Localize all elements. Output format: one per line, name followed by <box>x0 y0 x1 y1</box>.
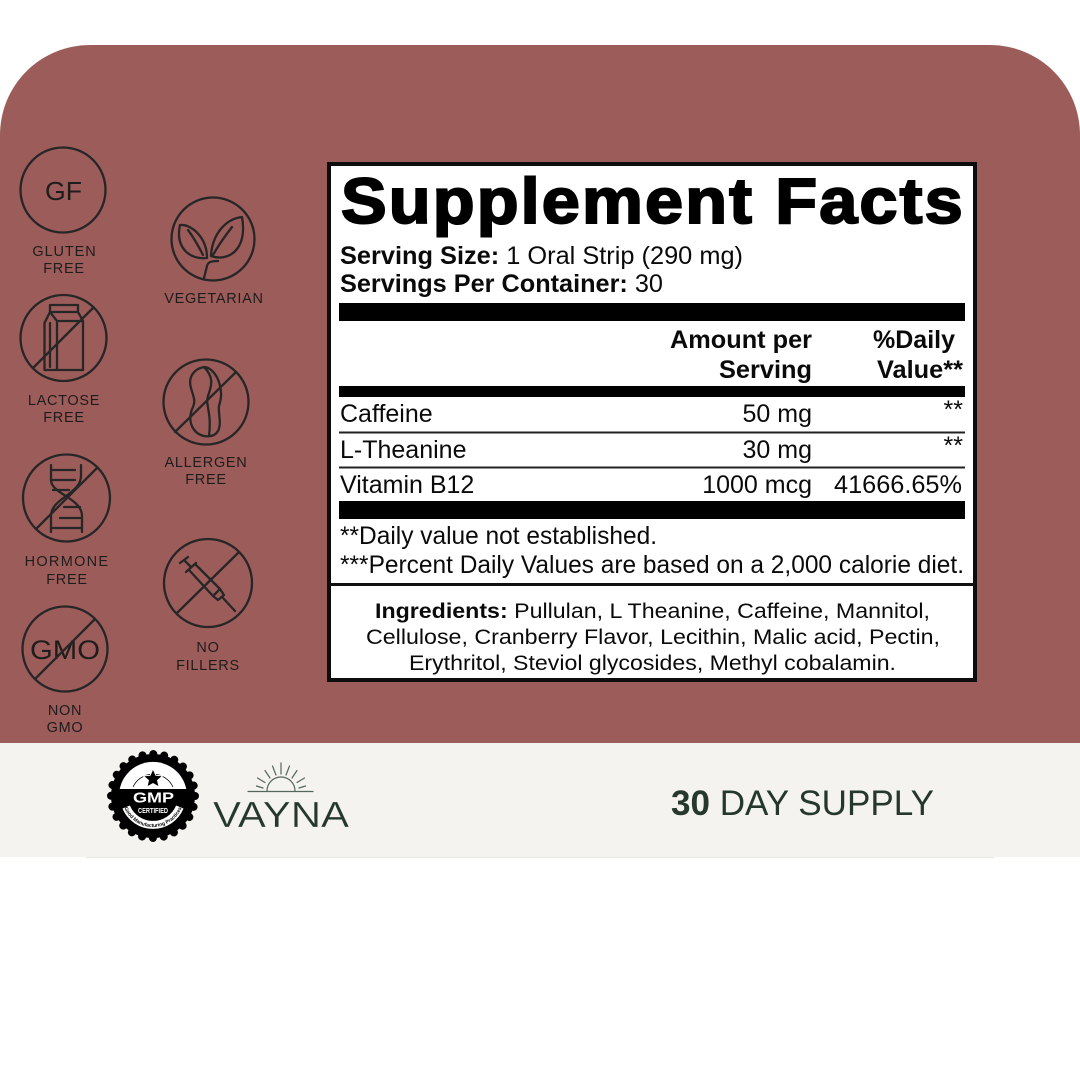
icon: GMP certified badge: GMP <box>133 790 174 806</box>
icon: non GMO: NON <box>48 703 82 719</box>
table header: Value** <box>877 356 963 384</box>
maroon panel background <box>0 45 1080 743</box>
icon: gluten free: FREE <box>43 261 85 277</box>
supply duration text: 30 DAY SUPPLY <box>671 784 934 823</box>
icon: vegetarian <box>164 198 264 307</box>
icon: non GMO <box>22 606 108 736</box>
row: l-theanine: ** <box>944 432 963 460</box>
serving information <box>340 242 743 298</box>
icon: lactose free: LACTOSE <box>28 393 100 409</box>
icon: allergen free: FREE <box>185 472 227 488</box>
icon: hormone free <box>23 454 110 588</box>
icon: GMP certified badge: CERTIFIED <box>138 808 168 815</box>
footnotes: **Daily value not established. <box>340 522 657 550</box>
ingredients: Ingredients: Pullulan, L Theanine, Caffeine, Mannitol, <box>375 599 930 623</box>
row: vitamin b12: Vitamin B12 <box>340 471 474 499</box>
icon: lactose free <box>20 295 106 426</box>
icon: vegetarian: VEGETARIAN <box>164 291 264 307</box>
icon: gluten free <box>20 148 106 277</box>
icon: no fillers <box>164 539 252 674</box>
table header: Amount per <box>670 326 812 354</box>
footer band <box>0 743 1080 857</box>
ingredients <box>366 599 940 675</box>
icon: allergen free <box>164 360 248 488</box>
heading: supplement facts: Supplement Facts <box>341 166 963 237</box>
table header <box>670 326 963 384</box>
row: caffeine: ** <box>944 396 963 424</box>
panel: supplement facts label <box>329 164 975 680</box>
row: l-theanine <box>340 432 963 464</box>
icon: hormone free: HORMONE <box>25 554 109 570</box>
icon: non GMO: GMO <box>47 720 83 736</box>
row: caffeine: Caffeine <box>340 400 433 428</box>
icon: non GMO: GMO <box>30 635 100 665</box>
icon: gluten free: GF <box>45 176 82 206</box>
footnotes <box>340 522 964 579</box>
row: l-theanine: 30 mg <box>743 436 812 464</box>
logo: Vayna <box>213 763 349 835</box>
table header: Serving <box>719 356 812 384</box>
logo: Vayna: VAYNA <box>213 794 349 835</box>
row: caffeine: 50 mg <box>743 400 812 428</box>
icon: GMP certified badge <box>107 750 199 842</box>
row: vitamin b12 <box>340 471 962 499</box>
serving information: Servings Per Container: 30 <box>340 270 663 298</box>
icon: hormone free: FREE <box>46 572 88 588</box>
ingredients: Cellulose, Cranberry Flavor, Lecithin, Malic acid, Pectin, <box>366 625 940 649</box>
row: vitamin b12: 41666.65% <box>834 471 962 499</box>
icon: no fillers: FILLERS <box>176 658 240 674</box>
row: caffeine <box>340 396 963 428</box>
footnotes: ***Percent Daily Values are based on a 2,000 calorie diet. <box>340 551 964 579</box>
table header: %Daily <box>873 326 955 354</box>
row: vitamin b12: 1000 mcg <box>702 471 812 499</box>
row: l-theanine: L-Theanine <box>340 436 466 464</box>
icon: lactose free: FREE <box>43 410 85 426</box>
ingredients: Erythritol, Steviol glycosides, Methyl cobalamin. <box>409 651 896 675</box>
icon: GMP certified badge: Good Manufacturing Practices <box>124 807 182 828</box>
icon: gluten free: GLUTEN <box>32 244 97 260</box>
serving information: Serving Size: 1 Oral Strip (290 mg) <box>340 242 743 270</box>
icon: no fillers: NO <box>196 640 220 656</box>
icon: allergen free: ALLERGEN <box>165 455 247 471</box>
